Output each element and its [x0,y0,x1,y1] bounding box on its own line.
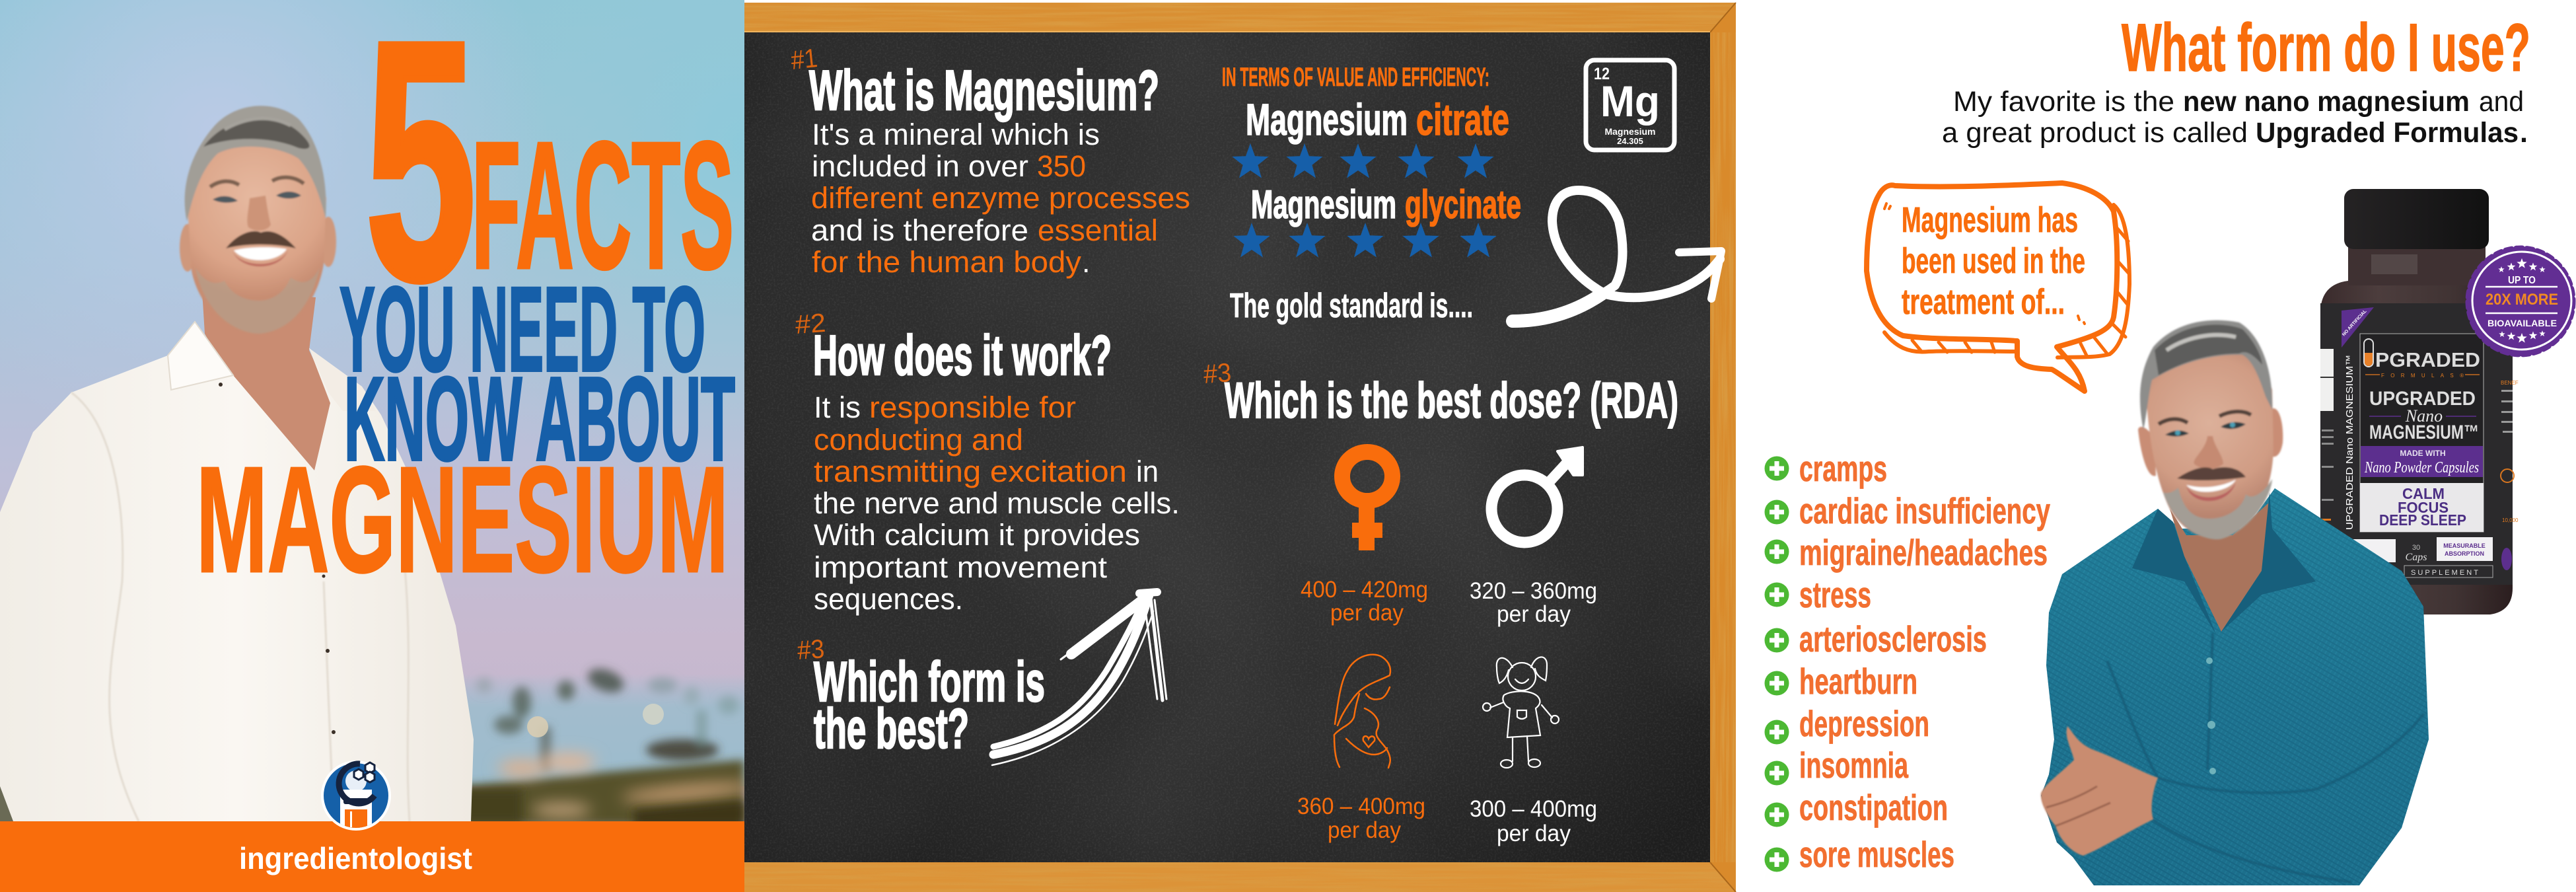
item: migraine/headaches [1765,532,2048,573]
bubble shadow line [1884,205,2129,357]
bubble text: treatment of... [1902,282,2065,322]
panel: what form do I use [1765,10,2573,885]
intro text: and [2479,86,2524,118]
gold standard note: The gold standard is.... [1230,287,1473,325]
dark gap beside the left arm [0,786,13,821]
form: Magnesium glycinate: Magnesium [1251,182,1396,227]
purple band: Nano Powder Capsules [2364,459,2479,476]
section: forms [1222,63,1521,325]
brand name: ingredientologist [239,841,472,875]
item: stress: stress [1799,574,1871,615]
dose: children [1470,796,1597,846]
form: Magnesium glycinate: glycinate [1405,182,1521,227]
text: FACTS [472,104,734,306]
form: Magnesium citrate: Magnesium [1246,95,1408,145]
item: depression [1765,703,1929,744]
title: MAGNESIUM: MAGNESIUM [196,436,729,604]
number #3: #3 [797,634,826,665]
purple band: MADE WITH [2400,449,2446,458]
board surface [744,32,1710,862]
neck [2170,502,2270,632]
sky and beach photo background [0,0,754,826]
stars: five for citrate [1232,143,1494,178]
body text: 350 [1037,149,1086,183]
purple band [2361,446,2483,477]
form: Magnesium citrate: citrate [1416,95,1509,145]
icon: female symbol [1342,452,1392,550]
item: migraine/headaches: migraine/headaches [1799,532,2048,573]
dose: women: per day [1330,600,1404,626]
footer bar [0,821,744,892]
brand logo: FORMULAS® [2381,373,2464,379]
body text: different enzyme processes [811,181,1190,215]
speech bubble [1867,183,2129,391]
brand logo: PGRADED [2375,348,2480,371]
heading: What is Magnesium?: What is Magnesium? [809,59,1159,122]
section 3: which form [797,634,1045,761]
item: heartburn: heartburn [1799,661,1917,702]
item: cramps [1765,448,1887,489]
chalk texture [744,32,1710,862]
item: cardiac insufficiency: cardiac insufficiency [1799,490,2050,531]
bottle label [2320,303,2513,585]
item: insomnia [1765,745,1908,786]
badge: 20X more bioavailable: 20X MORE [2486,291,2558,309]
neck and chest [202,291,334,470]
folded arm crease lines [2107,633,2424,882]
icon: girl [1483,657,1559,768]
heading: Which form is the best?: the best? [814,698,969,761]
small chips: ABSORPTION [2445,550,2484,557]
panel: cover: YOU NEED TO [340,262,705,396]
bubble text [1902,200,2085,322]
body text [814,390,1180,616]
benefits panel: DEEP SLEEP [2379,511,2466,529]
product name: MAGNESIUM™ [2369,422,2479,443]
item: heartburn [1765,661,1917,702]
bubble hatching [1912,228,2129,357]
badge: 20X more bioavailable: BIOAVAILABLE [2487,318,2557,328]
stars: five for glycinate [1233,223,1497,258]
item: stress [1765,574,1871,615]
body text: . [1082,245,1091,279]
right side label: 10,000 [2502,517,2519,523]
item: arteriosclerosis: arteriosclerosis [1799,618,1987,659]
teal shirt [2041,488,2429,885]
bottle cap [2344,189,2489,249]
small chips: 30 [2412,544,2420,552]
item: sore muscles [1765,834,1954,875]
collar [168,322,233,390]
photo: smiling man in white shirt [0,106,474,821]
intro text: My favorite is the [1953,86,2174,118]
small chips: Caps [2406,552,2427,563]
buttons [2206,657,2216,774]
panel: cover [0,0,754,892]
body text: conducting and [814,423,1023,457]
dose: pregnant [1297,794,1425,843]
white shirt [0,322,474,821]
dose: pregnant: per day [1328,817,1401,843]
body text: the nerve and muscle cells. [814,486,1180,520]
section: dose [1203,358,1678,846]
section 2 [795,309,1180,616]
intro text: new nano magnesium [2183,86,2470,118]
body text: in [1136,455,1159,488]
item: depression: depression [1799,703,1929,744]
head [2138,320,2283,539]
item: sore muscles: sore muscles [1799,834,1954,875]
body text: essential [1038,213,1158,247]
number #3: #3 [1203,358,1233,389]
body text [811,118,1190,279]
item: cramps: cramps [1799,448,1887,489]
icon: ingredientologist logo [321,761,391,836]
body text: With calcium it provides [814,518,1140,552]
intro text: Upgraded Formulas [2256,117,2519,149]
product name [2369,388,2479,443]
intro text: a great product is called [1942,117,2248,149]
body text: transmitting excitation [814,455,1127,488]
item: arteriosclerosis [1765,618,1987,659]
bubble text: been used in the [1902,241,2085,281]
product name: UPGRADED [2369,388,2476,410]
head [180,106,336,335]
text: KNOW ABOUT [344,353,735,486]
dose: children: 300 – 400mg [1470,796,1597,822]
shirt details [71,392,410,821]
product name: Nano [2405,406,2443,426]
item: constipation: constipation [1799,787,1948,828]
arrow: chalk arrow pointing up [992,592,1166,765]
bubble outline [1867,183,2117,391]
side product name: UPGRADED Nano MAGNESIUM™ [2344,355,2355,530]
arrow: looping chalk arrow [1513,190,1721,321]
corner ribbon [2342,307,2374,348]
front panel [2360,334,2484,532]
dose: pregnant: 360 – 400mg [1297,794,1425,819]
benefits panel: CALM [2402,485,2445,502]
brand logo [2364,339,2480,379]
body text: sequences. [814,582,963,616]
section 1 [789,44,1190,279]
hand [2041,726,2158,856]
photo: man in teal shirt [2041,320,2429,885]
badge: 20X more bioavailable: UP TO [2508,275,2536,286]
icon: pregnant woman [1334,655,1390,768]
right side label: BENEF [2501,380,2519,386]
dose: women: 400 – 420mg [1301,577,1428,603]
panel: chalkboard [744,3,1736,892]
intro text [1942,86,2528,149]
product bottle [2320,189,2519,614]
collar [2132,492,2316,634]
side label panel [2320,349,2334,521]
heading: Which form is the best? [814,651,1045,761]
dose: children: per day [1497,821,1571,846]
body text: It's a mineral which is [812,118,1100,151]
number #2: #2 [795,309,827,340]
body text: for the human body [812,245,1082,279]
body text: and is therefore [811,213,1028,247]
number #1: #1 [789,44,819,75]
dose: men [1470,578,1597,627]
right side label [2501,380,2519,570]
body text: included in over [812,149,1028,183]
wooden frame [744,3,1736,892]
benefits panel: FOCUS [2398,499,2449,516]
benefits panel [2360,483,2484,532]
quote marks [1884,204,2085,324]
body text: responsible for [869,390,1076,424]
heading: How does it work?: How does it work? [813,324,1112,387]
checklist of conditions [1765,448,2050,875]
body text: It is [814,390,861,424]
icon: Mg periodic tile [1586,60,1674,150]
intro text: . [2520,117,2528,149]
dose: women [1301,577,1428,626]
body text: important movement [814,550,1108,584]
item: insomnia: insomnia [1799,745,1908,786]
icon: Mg periodic tile: 12 [1594,65,1610,83]
small chips: SUPPLEMENT [2411,569,2478,577]
heading: Which form is the best?: Which form is [814,651,1045,714]
buttons [219,383,336,734]
small chips [2353,537,2493,577]
chalk dust [744,32,1710,862]
icon: Mg periodic tile: 24.305 [1617,136,1643,146]
bubble text: Magnesium has [1902,200,2078,240]
heading: best dose: Which is the best dose? (RDA) [1225,373,1678,429]
bottle body [2320,281,2513,614]
badge: 20X more bioavailable [2468,248,2573,354]
icon: male symbol [1491,447,1583,542]
small chips: MEASURABLE [2443,542,2486,549]
bottle neck [2348,246,2486,285]
icon: Mg periodic tile: Magnesium [1604,126,1656,137]
item: constipation [1765,787,1948,828]
intro caption: IN TERMS OF VALUE AND EFFICIENCY: [1222,63,1489,92]
dose: men: per day [1497,601,1571,627]
dose: men: 320 – 360mg [1470,578,1597,604]
corner ribbon: NO ARTIFICIAL [2342,309,2368,337]
item: cardiac insufficiency [1765,490,2050,531]
icon: Mg periodic tile: Mg [1600,77,1660,126]
shirt fabric pattern [2041,488,2429,885]
